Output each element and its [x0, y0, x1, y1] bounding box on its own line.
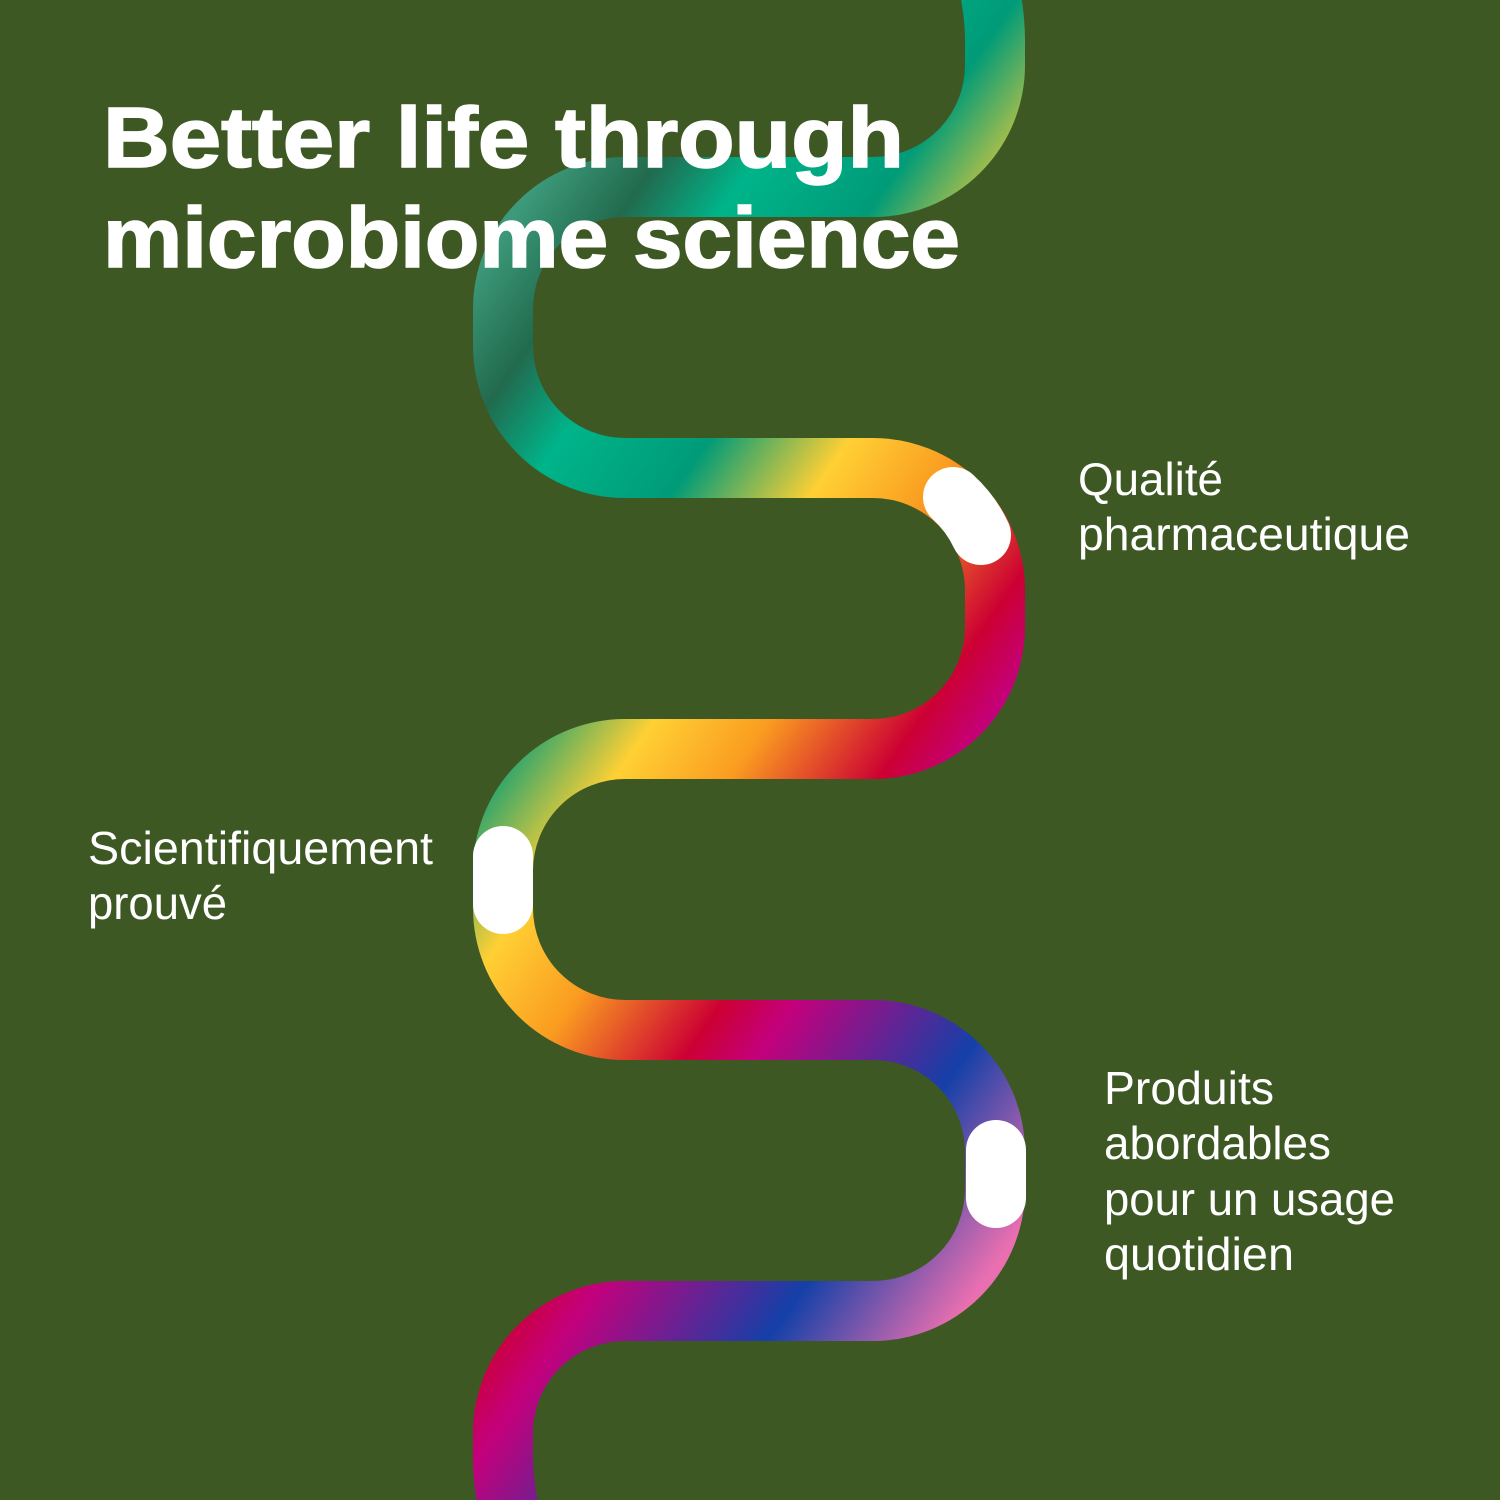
marker: scientifically proven: [473, 856, 533, 904]
label: scientifically proven: prouvé: [88, 877, 227, 929]
label: scientifically proven: Scientifiquement: [88, 822, 433, 874]
winding gradient path: [503, 0, 995, 1500]
label: pharmaceutical quality: pharmaceutique: [1078, 508, 1410, 560]
label: scientifically proven: [88, 822, 433, 929]
marker: pharmaceutical quality: [953, 497, 981, 535]
label: affordable products: Produits: [1104, 1062, 1274, 1114]
label: pharmaceutical quality: [1078, 453, 1410, 560]
marker: affordable products: [966, 1150, 1026, 1198]
label: pharmaceutical quality: Qualité: [1078, 453, 1223, 505]
title: Better life through: [103, 91, 904, 186]
title: [103, 91, 960, 286]
title: microbiome science: [103, 191, 960, 286]
label: affordable products: [1104, 1062, 1395, 1280]
label: affordable products: quotidien: [1104, 1228, 1294, 1280]
label: affordable products: pour un usage: [1104, 1173, 1395, 1225]
label: affordable products: abordables: [1104, 1117, 1331, 1169]
